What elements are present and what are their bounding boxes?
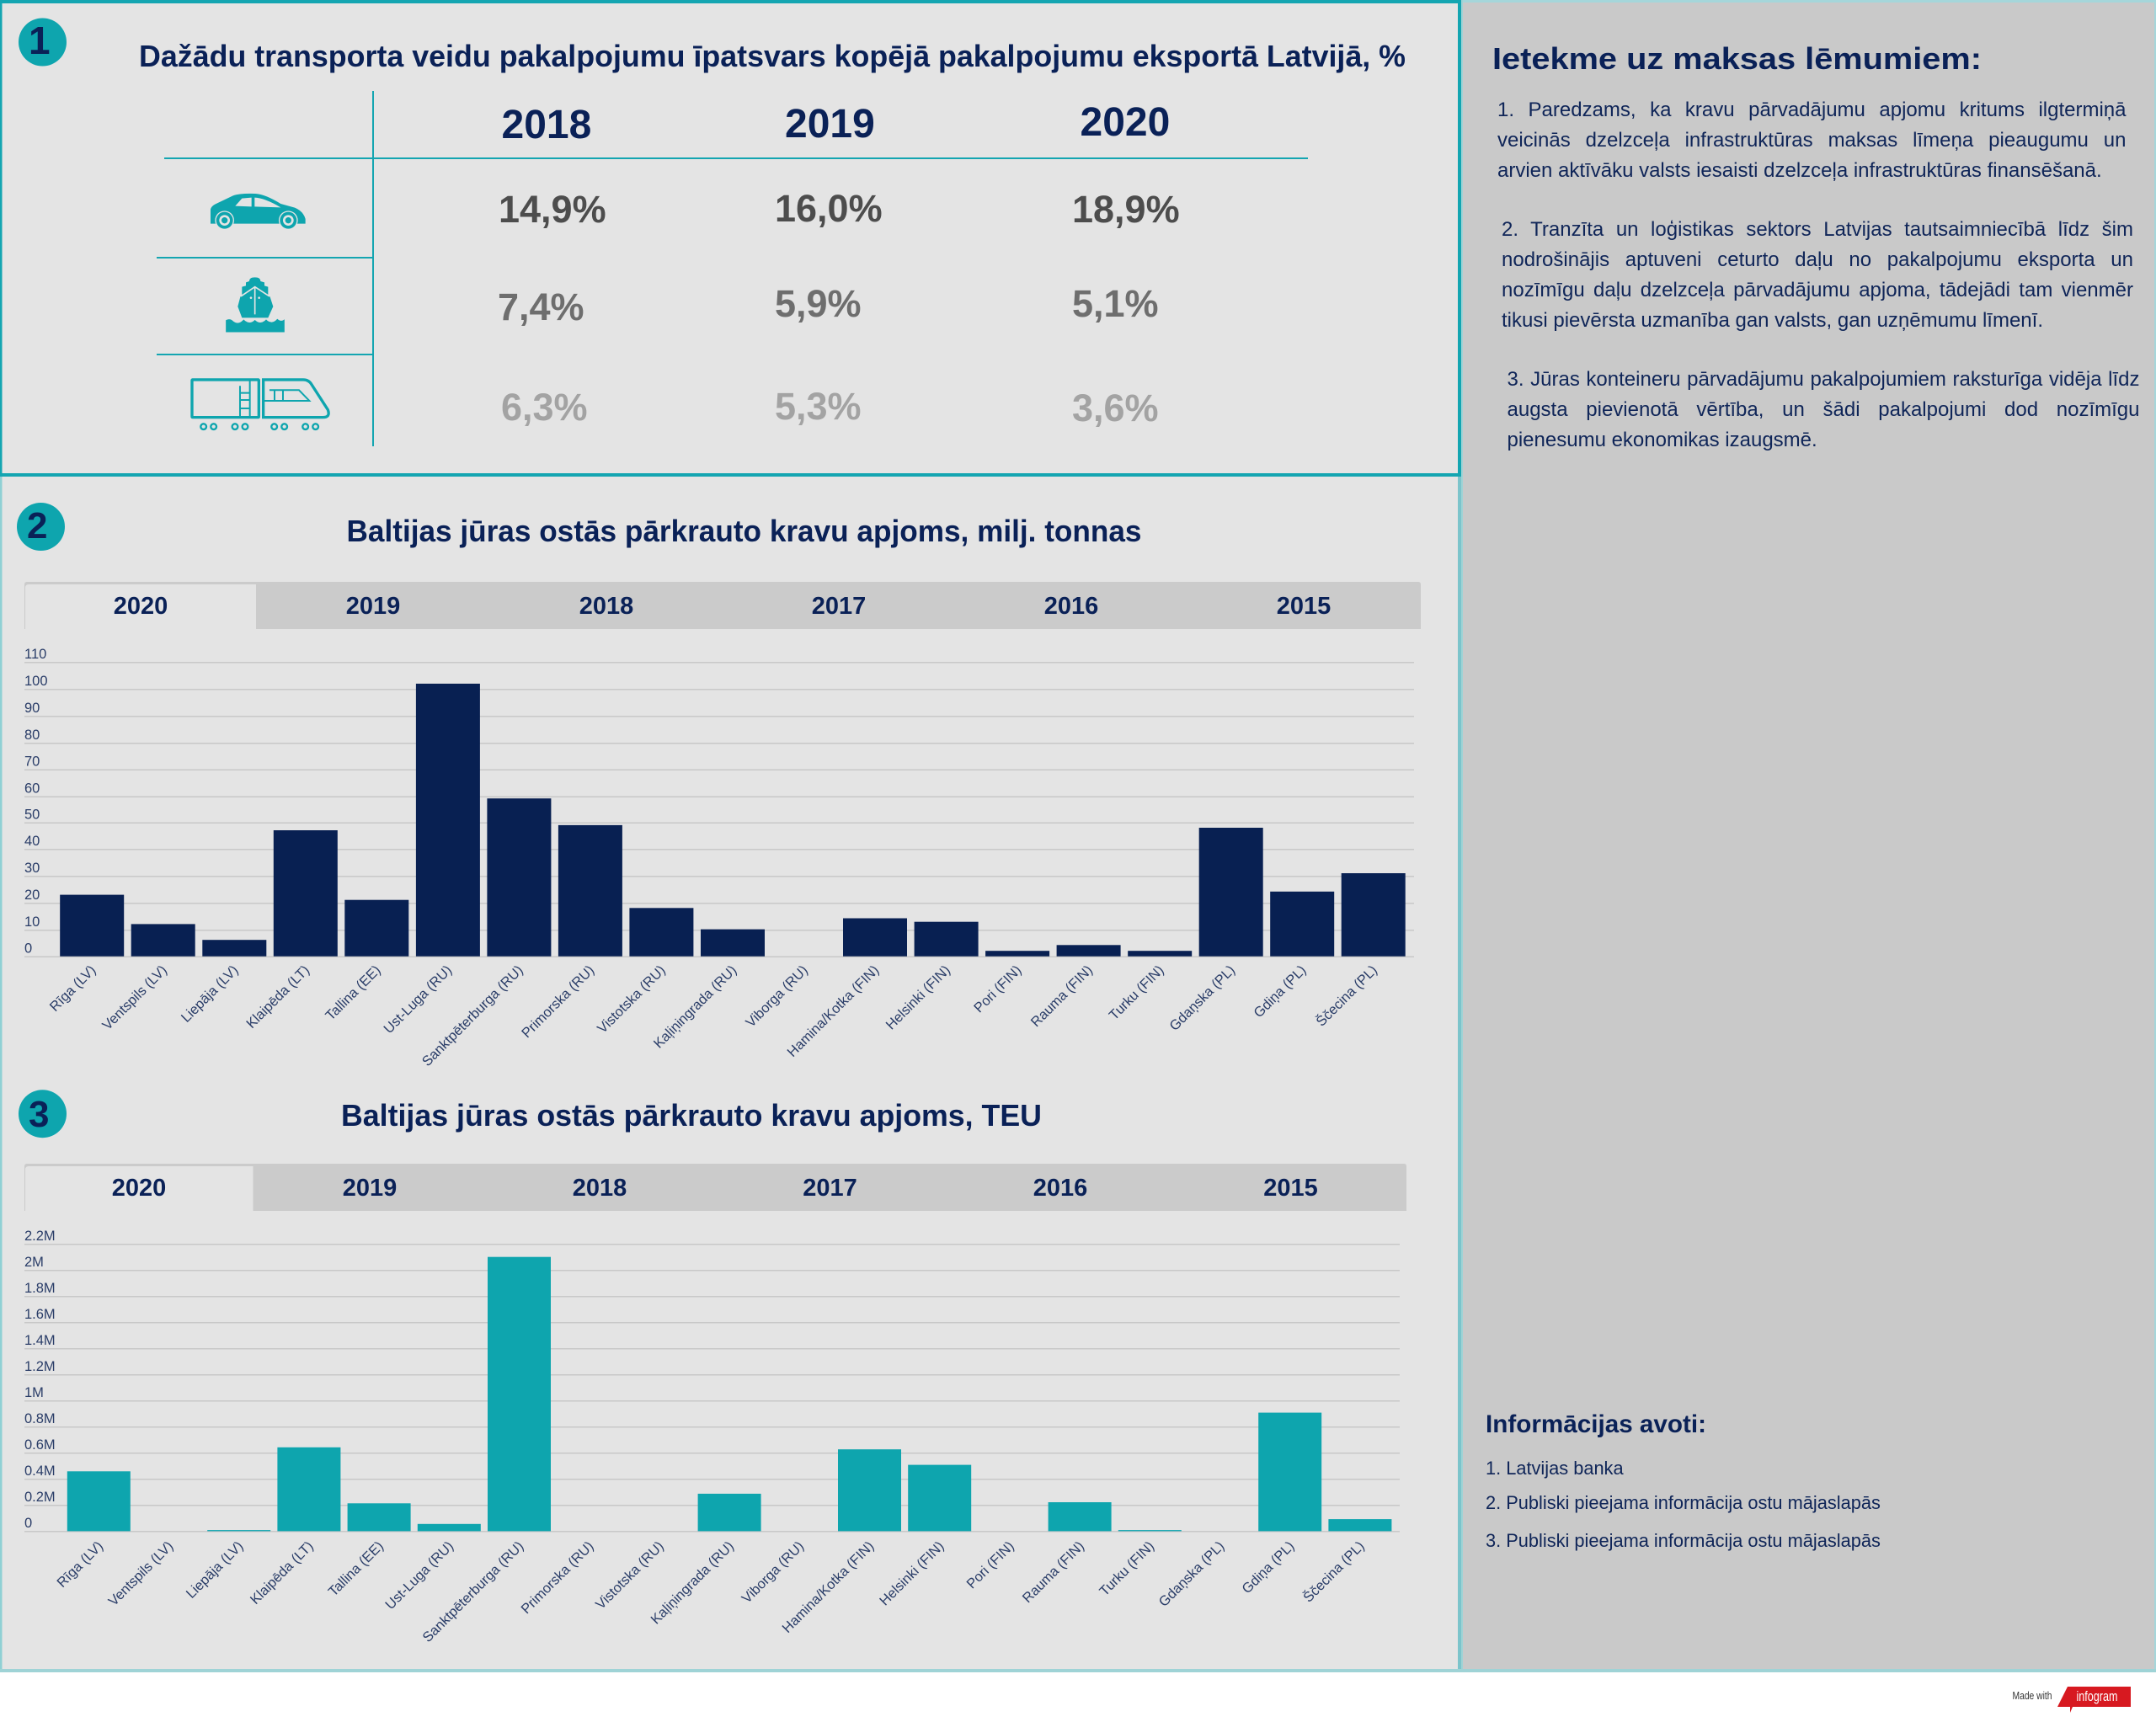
x axis labels: ports: Primorska (RU) [518,1538,597,1617]
x axis labels: ports: Ust-Luga (RU) [382,1538,456,1613]
text: source 3: 3. Publiski pieejama informācija ostu mājaslapās [1486,1530,1881,1551]
icon: car [211,194,306,230]
x axis labels: ports: Gdaņska (PL) [1156,1538,1227,1610]
text block: point 1: arvien aktīvāku valsts iesaisti dzelzceļa infrastruktūras finansēšanā. [1497,159,2102,182]
footer: made with infogram logo: infogram [2077,1688,2117,1704]
x axis labels: ports: Pori (FIN) [971,962,1024,1016]
row 2 values: sea: 5,1% [1072,282,1159,325]
badge: number 1: 1 [29,19,51,62]
y axis labels: 0.2M [24,1490,56,1505]
row 3 values: rail: 3,6% [1072,387,1159,429]
badge: number 3: 3 [29,1094,49,1135]
table grid lines [157,91,1308,446]
y axis labels: 2.2M [24,1229,56,1244]
row 3 values: rail [501,385,1159,429]
y axis labels: 0.8M [24,1411,56,1426]
year tabs: 2016 [1033,1175,1087,1202]
footer: made with infogram logo [2013,1687,2131,1713]
badge: number 1 [19,19,67,66]
x axis labels: ports: Primorska (RU) [519,962,597,1041]
y axis labels: 40 [24,834,40,849]
year tabs: 2020 [112,1175,166,1202]
x axis labels: ports: Vistotska (RU) [595,962,669,1037]
x axis labels: ports [47,962,1380,1069]
x axis labels: ports: Ščecina (PL) [1299,1538,1368,1606]
row 2 values: sea: 5,9% [775,282,862,325]
bar chart: TEU 2020 [67,1257,1391,1531]
x axis labels: ports: Kaļiņingrada (RU) [651,962,739,1052]
year tabs [24,1164,1406,1211]
badge: number 3 [19,1090,67,1138]
panel: TEU volume chart [0,1066,1461,1672]
x axis labels: ports: Turku (FIN) [1097,1538,1157,1599]
icon: ship [226,277,285,333]
badge: number 2: 2 [27,505,47,546]
x axis labels: ports: Gdaņska (PL) [1166,962,1238,1034]
text block: point 3: augsta pievienotā vērtība, un šādi pakalpojumi dod nozīmīgu [1508,398,2139,421]
y axis labels: 2M [24,1255,44,1270]
table header: years: 2018 [502,103,591,147]
year tabs: 2016 [1044,593,1098,620]
icon: train [192,380,328,429]
x axis labels: ports: Tallina (EE) [326,1538,387,1599]
x axis labels: ports: Rauma (FIN) [1020,1538,1087,1606]
year tabs: 2017 [812,593,866,620]
y axis labels: 1M [24,1385,44,1400]
heading: transport share title: Dažādu transporta veidu pakalpojumu īpatsvars kopējā pakalpojumu eksportā Latvijā, % [139,39,1406,73]
text block: point 2 [1502,218,2133,332]
heading: cargo volume title: Baltijas jūras ostās pārkrauto kravu apjoms, milj. tonnas [347,514,1142,548]
x axis labels: ports: Liepāja (LV) [184,1538,247,1602]
text block: point 3: 3. Jūras konteineru pārvadājumu pakalpojumiem raksturīga vidēja līdz [1508,368,2139,391]
x axis labels: ports: Hamina/Kotka (FIN) [780,1538,877,1636]
year tabs [24,582,1421,629]
x axis labels: ports: Rauma (FIN) [1028,962,1096,1030]
x axis labels: ports: Helsinki (FIN) [883,962,953,1032]
y axis labels: 0.6M [24,1437,56,1453]
y axis labels: 70 [24,754,40,770]
x axis labels: ports: Ventspils (LV) [99,962,170,1033]
y axis labels: 0 [24,1516,32,1531]
table header: years: 2020 [1080,100,1170,145]
y axis labels: 0 [24,941,32,957]
row 3 values: rail: 6,3% [501,386,588,429]
x axis labels: ports: Gdiņa (PL) [1239,1538,1298,1597]
text block: point 1: 1. Paredzams, ka kravu pārvadājumu apjomu kritums ilgtermiņā [1497,99,2126,121]
y axis labels: 1.2M [24,1359,56,1374]
footer: made with infogram logo: Made with [2013,1689,2052,1702]
year tabs: 2019 [346,593,400,620]
row 1 values: road: 14,9% [499,188,606,231]
text block: point 2: 2. Tranzīta un loģistikas sektors Latvijas tautsaimniecībā līdz šim [1502,218,2133,241]
bar chart: million tonnes 2020 [60,684,1406,957]
badge: number 2 [17,503,65,551]
text block: point 2: nozīmīgu daļu dzelzceļa pārvadājumu apjoma, tādejādi tam vienmēr [1502,279,2133,301]
x axis labels: ports: Liepāja (LV) [179,962,242,1026]
row 1 values: road: 18,9% [1072,188,1180,231]
x axis labels: ports: Helsinki (FIN) [877,1538,947,1608]
y axis labels: 50 [24,807,40,822]
panel: cargo volume chart [0,477,1461,1066]
x axis labels: ports: Rīga (LV) [47,962,99,1015]
y axis labels: 100 [24,674,48,689]
x axis labels: ports: Ust-Luga (RU) [381,962,455,1037]
y axis labels: 10 [24,914,40,930]
year tabs: 2015 [1263,1175,1318,1202]
text: source 1: 1. Latvijas banka [1486,1458,1624,1479]
text block: point 2: nodrošinājis aptuveni ceturto daļu no pakalpojumu eksporta un [1502,248,2133,271]
text block: point 2: tikusi pievērsta uzmanība gan valsts, gan uzņēmumu līmenī. [1502,309,2043,332]
year tabs: 2015 [1277,593,1331,620]
y axis labels: 110 [24,647,46,662]
x axis labels: ports: Pori (FIN) [963,1538,1017,1591]
x axis labels: ports: Viborga (RU) [743,962,811,1031]
x axis labels: ports: Rīga (LV) [54,1538,106,1591]
y axis labels: 90 [24,701,40,716]
x axis labels: ports: Turku (FIN) [1107,962,1167,1023]
x axis labels: ports: Kaļiņingrada (RU) [648,1538,737,1628]
chart gridlines [24,662,1414,957]
table header: years [502,100,1170,147]
y axis labels: 1.4M [24,1333,56,1348]
row 1 values: road [499,187,1180,231]
y axis labels: 20 [24,888,40,903]
text: source 2: 2. Publiski pieejama informācija ostu mājaslapās [1486,1492,1881,1513]
y axis labels: 80 [24,728,40,743]
heading: impact title: Ietekme uz maksas lēmumiem: [1492,41,1982,76]
x axis labels: ports: Ščecina (PL) [1313,962,1380,1030]
y axis labels: 0.4M [24,1463,56,1479]
x axis labels: ports [54,1538,1368,1645]
year tabs: 2019 [343,1175,397,1202]
y axis labels: 60 [24,781,40,797]
x axis labels: ports: Gdiņa (PL) [1251,962,1310,1021]
x axis labels: ports: Sanktpēterburga (RU) [419,1538,526,1645]
row 2 values: sea [498,282,1159,328]
year tabs: 2017 [803,1175,857,1202]
year tabs: 2020 [114,593,168,620]
chart gridlines [24,1244,1400,1533]
y axis labels: 1.8M [24,1281,56,1296]
heading: TEU volume title: Baltijas jūras ostās pārkrauto kravu apjoms, TEU [341,1098,1042,1133]
text block: point 1: veicinās dzelzceļa infrastruktūras maksas līmeņa pieaugumu un [1497,129,2126,152]
y axis labels [24,647,48,957]
y axis labels: 30 [24,861,40,876]
text block: point 1 [1497,99,2126,182]
year tabs: 2018 [579,593,633,620]
row 1 values: road: 16,0% [775,187,883,230]
panel: transport share table [0,0,1461,477]
row 3 values: rail: 5,3% [775,385,862,428]
heading: sources title: Informācijas avoti: [1486,1410,1706,1438]
x axis labels: ports: Hamina/Kotka (FIN) [785,962,882,1060]
x axis labels: ports: Klaipēda (LT) [243,962,312,1032]
text block: point 3 [1508,368,2139,451]
x axis labels: ports: Klaipēda (LT) [248,1538,317,1607]
y axis labels [24,1229,56,1531]
table header: years: 2019 [785,102,875,147]
text block: point 3: pienesumu ekonomikas izaugsmē. [1508,429,1817,451]
x axis labels: ports: Viborga (RU) [739,1538,807,1607]
row 2 values: sea: 7,4% [498,285,584,328]
year tabs: 2018 [573,1175,627,1202]
x axis labels: ports: Tallina (EE) [323,962,384,1023]
x axis labels: ports: Ventspils (LV) [105,1538,176,1609]
x axis labels: ports: Vistotska (RU) [593,1538,667,1613]
panel: impact on charging decisions and sources [1461,0,2156,1672]
y axis labels: 1.6M [24,1307,56,1322]
